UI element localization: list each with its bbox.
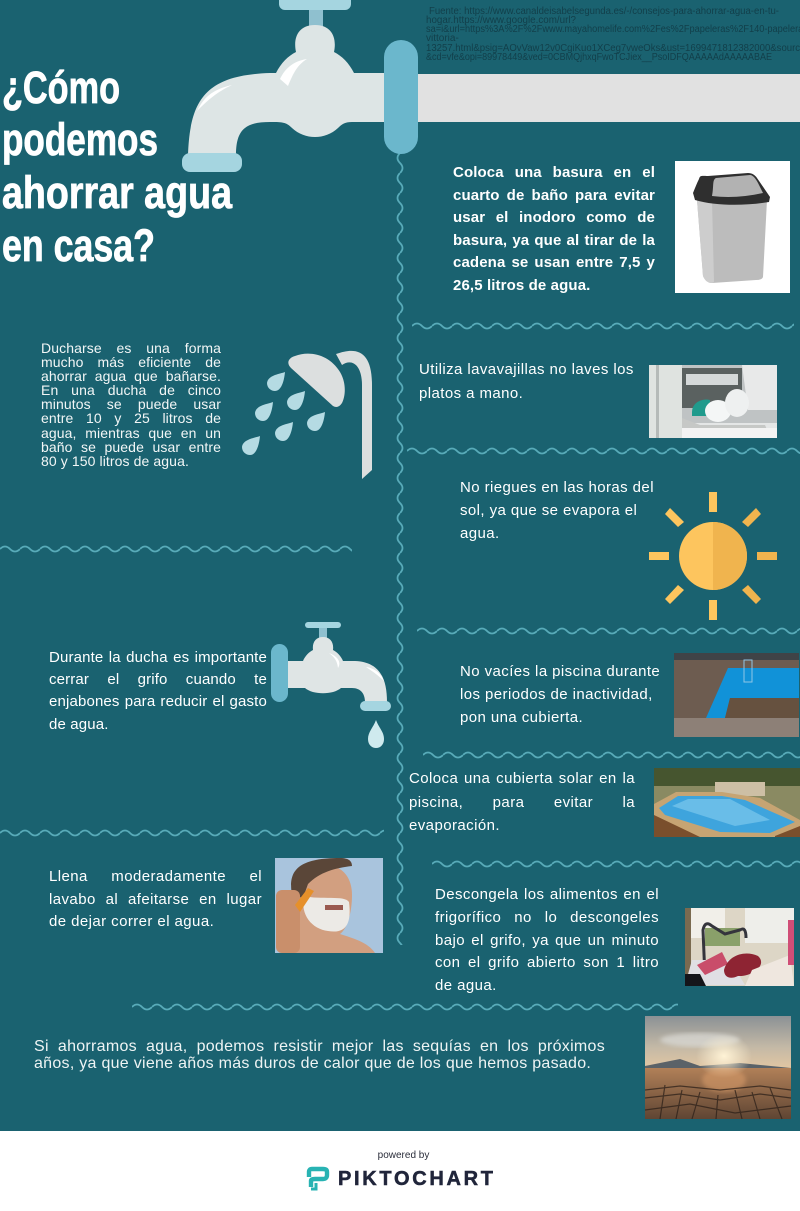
icon: shower xyxy=(242,351,372,479)
text: thawing tip: con el grifo abierto son 1 litro xyxy=(435,954,659,971)
text: shower vs bath: agua, mientras que en un xyxy=(41,425,221,441)
text: shower vs bath: Ducharse es una forma xyxy=(41,340,221,356)
text: thawing tip: de agua. xyxy=(435,977,497,994)
wave divider 8 xyxy=(132,1002,678,1012)
text: watering tip: No riegues en las horas del xyxy=(460,479,654,496)
text: conclusion: años, ya que viene años más duros de calor que de los que hemos pasado. xyxy=(34,1055,591,1072)
text: solar cover tip: evaporación. xyxy=(409,817,500,834)
text: dishwasher tip: platos a mano. xyxy=(419,385,523,402)
text: watering tip xyxy=(460,479,654,542)
title xyxy=(2,62,233,271)
wave divider 6 xyxy=(0,828,384,838)
text: shower vs bath: En una ducha de cinco xyxy=(41,382,221,398)
text: thawing tip: bajo el grifo, ya que un minuto xyxy=(435,932,659,949)
title: ahorrar agua xyxy=(2,167,233,218)
icon: small faucet xyxy=(271,622,391,748)
text: shower vs bath: mucho más eficiente de xyxy=(41,354,221,370)
text: faucet in shower tip xyxy=(49,649,267,733)
title: podemos xyxy=(2,114,158,165)
text: solar cover tip xyxy=(409,770,635,834)
wave divider 4 xyxy=(417,626,800,636)
text: shower vs bath: entre 10 y 25 litros de xyxy=(41,410,221,426)
text: shower vs bath: 80 y 150 litros de agua. xyxy=(41,453,189,469)
text: shower vs bath xyxy=(41,340,221,469)
text: conclusion: Si ahorramos agua, podemos resistir mejor las sequías en los próximos xyxy=(34,1038,605,1055)
text: thawing tip xyxy=(435,886,659,994)
title: en casa? xyxy=(2,220,155,271)
text: shaving tip: Llena moderadamente el xyxy=(49,868,262,885)
text: faucet in shower tip: enjabones para reducir el gasto xyxy=(49,693,267,710)
photo: trash bin xyxy=(675,161,790,293)
text: trash tip xyxy=(453,164,655,294)
text: solar cover tip: Coloca una cubierta solar en la xyxy=(409,770,635,787)
text: shower vs bath: baño se puede usar entre xyxy=(41,439,221,455)
text: trash tip: usar el inodoro como de xyxy=(453,209,655,226)
vertical wave xyxy=(395,153,405,945)
text: trash tip: Coloca una basura en el xyxy=(453,164,655,181)
source citation: hogar.https://www.google.com/url? xyxy=(426,15,576,26)
photo: cracked dry earth at sunset xyxy=(645,1016,791,1119)
text: shaving tip: lavabo al afeitarse en lugar xyxy=(49,891,262,908)
source citation: Fuente: https://www.canaldeisabelsegunda.es/-/consejos-para-ahorrar-agua-en-tu- xyxy=(429,6,779,17)
text: watering tip: sol, ya que se evapora el xyxy=(460,502,637,519)
text: trash tip: cuarto de baño para evitar xyxy=(453,187,655,204)
photo: dishwasher xyxy=(649,365,777,438)
photo: pool with solar cover xyxy=(654,768,800,837)
text: thawing tip: frigorífico no lo descongeles xyxy=(435,909,659,926)
wave divider 3 xyxy=(0,544,352,554)
grey pipe bar xyxy=(415,74,800,122)
source citation: &cd=vfe&opi=89978449&ved=0CBMQjhxqFwoTCJiex__PsoIDFQAAAAAdAAAAABAE xyxy=(426,52,772,63)
source citation xyxy=(426,6,800,63)
wave divider 5 xyxy=(423,750,800,760)
text: trash tip: 26,5 litros de agua. xyxy=(453,277,590,294)
text: pool cover tip: los periodos de inactividad, xyxy=(460,686,653,703)
text: conclusion xyxy=(34,1038,605,1072)
text: solar cover tip: piscina, para evitar la xyxy=(409,794,635,810)
text: faucet in shower tip: cerrar el grifo cuando te xyxy=(49,671,267,688)
text: pool cover tip: pon una cubierta. xyxy=(460,709,583,726)
footer: powered by: powered by xyxy=(378,1150,429,1161)
text: dishwasher tip xyxy=(419,361,634,402)
text: thawing tip: Descongela los alimentos en el xyxy=(435,886,659,903)
text: dishwasher tip: Utiliza lavavajillas no laves los xyxy=(419,361,634,378)
text: trash tip: cadena se usan entre 7,5 y xyxy=(453,254,655,271)
text: watering tip: agua. xyxy=(460,525,500,542)
icon: sun xyxy=(649,492,777,620)
text: trash tip: basura, ya que al tirar de la xyxy=(453,232,655,249)
photo: thawing meat xyxy=(685,908,794,986)
text: shaving tip xyxy=(49,868,262,930)
text: shaving tip: de dejar correr el agua. xyxy=(49,913,214,930)
photo: man shaving xyxy=(275,858,383,953)
wave divider 1 xyxy=(412,321,794,331)
text: shower vs bath: minutos se puede usar xyxy=(41,396,221,412)
wave divider 2 xyxy=(407,446,800,456)
wave divider 7 xyxy=(432,859,800,869)
photo: empty pool xyxy=(674,653,799,737)
source citation: vittoria- xyxy=(426,33,459,44)
text: shower vs bath: ahorrar agua que bañarse. xyxy=(41,368,221,384)
text: faucet in shower tip: de agua. xyxy=(49,716,109,733)
footer: Piktochart logo: PIKTOCHART xyxy=(338,1168,493,1190)
text: pool cover tip: No vacíes la piscina durante xyxy=(460,663,660,680)
text: pool cover tip xyxy=(460,663,660,726)
icon: large faucet xyxy=(182,0,418,172)
text: faucet in shower tip: Durante la ducha es importante xyxy=(49,649,267,666)
title: ¿Cómo xyxy=(2,62,120,113)
